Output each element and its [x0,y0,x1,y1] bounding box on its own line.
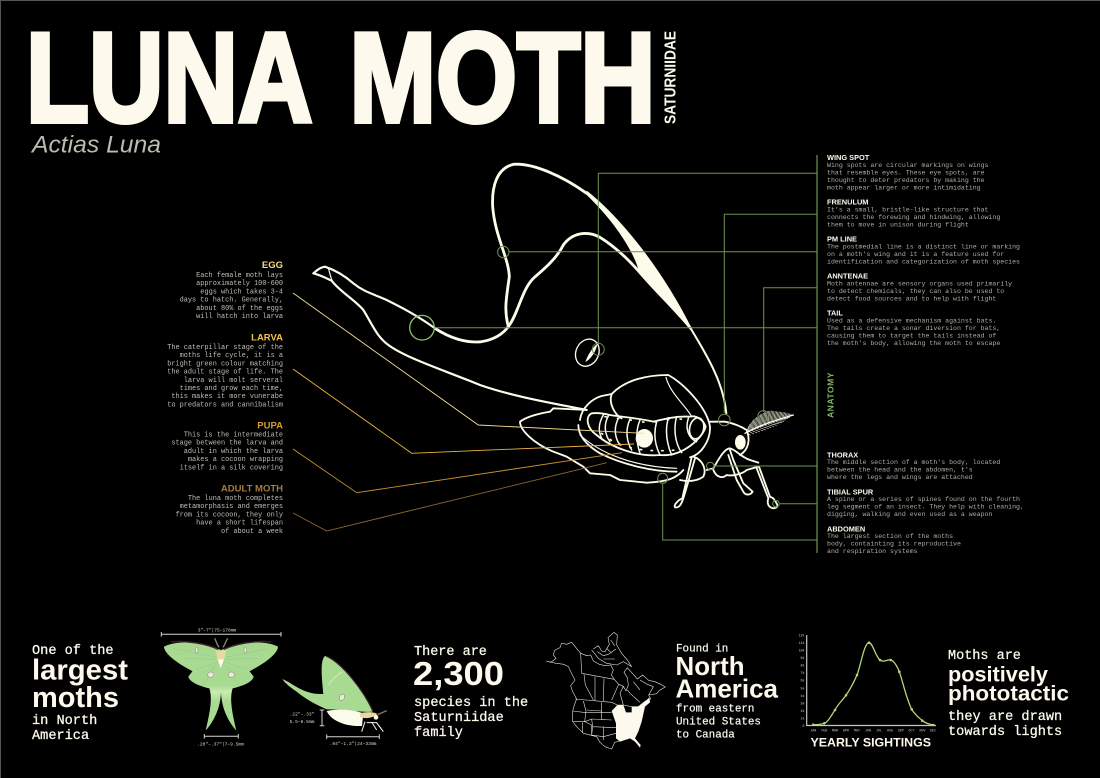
forewing outline [313,164,726,413]
x axis labels: DEC [930,728,936,732]
family label: SATURNIIDAE [662,31,680,124]
line chart: yearly sightings [799,634,936,750]
life cycle: larva: to predators and cannibalism [167,401,283,409]
anatomy: pm line: identification and categorization of moth species [827,258,1020,265]
sightings curve [813,643,933,725]
life cycle: egg: days to hatch. Generally, [180,297,283,305]
anatomy: tail: The tails create a sonar diversion for bats, [827,325,1000,332]
anatomy callout lines [410,155,817,553]
fact: north america: from eastern [676,704,754,716]
anatomy: antennae: Moth antennae are sensory organs used primarily [827,280,1012,287]
anatomy: tail: the moth's body, allowing the moth to escape [827,340,1000,347]
anatomy: wing spot: thought to deter predators by making the [827,177,985,184]
fact: phototactic: towards lights [948,725,1062,740]
chart title: YEARLY SIGHTINGS [810,736,931,750]
fact: phototactic: positively [948,663,1048,687]
life cycle: pupa: stage between the larva and [171,440,283,448]
fact: phototactic: phototactic [948,682,1069,706]
fact: species count: family [414,726,463,741]
life cycle: egg: approximately 100-600 [196,280,283,288]
y axis labels: 2k [801,709,805,713]
y axis labels: 6k [801,679,805,683]
anatomy: tibial spur: digging, walking and even used as a weapon [827,511,992,518]
anatomy: abdomen: body, containting its reproductive [827,540,961,548]
y axis labels: 9k [801,656,805,660]
anatomy: thorax: where the legs and wings are attached [827,474,973,481]
life cycle: adult moth: ADULT MOTH [221,484,283,495]
anatomy: tail: TAIL [827,309,843,318]
life cycle: adult moth: have a short lifespan [196,520,283,528]
life cycle: egg: eggs which takes 3-4 [200,288,283,296]
anatomy: wing spot [827,153,989,192]
chart axes [807,635,936,726]
anatomy: pm line: PM LINE [827,234,857,244]
y axis labels [799,634,805,728]
anatomy: thorax: The middle section of a moth's body, located [827,459,1000,466]
map of North America [546,632,665,749]
life cycle: adult moth: from its cocoon, they only [175,511,283,519]
anatomy: tail: causing them to target the tails instead of [827,332,996,339]
x axis labels: AUG [887,728,893,732]
title [26,6,656,148]
life cycle: larva: this makes it more vunerabe [171,393,283,401]
life cycle: larva: the adult stage of life. The [167,369,283,377]
fact: species count: species in the [414,696,528,711]
x axis labels: NOV [920,728,925,732]
life cycle: larva: The caterpillar stage of the [167,344,283,352]
fact: largest moths: largest [32,654,128,686]
fact: largest moths: America [32,729,89,744]
anatomy: abdomen [827,524,961,555]
life cycle: larva: times and grow each time, [180,385,283,393]
anatomy: thorax [827,450,1000,481]
fact: largest moths [32,644,128,744]
x axis labels: OCT [909,728,914,732]
dimension labels [161,628,379,747]
x axis labels: MAY [854,728,860,732]
fact: species count: There are [414,645,487,660]
anatomy: antennae: ANNTENAE [827,272,868,281]
life cycle: pupa: This is the intermediate [184,432,283,440]
y axis labels: 4k [801,694,805,698]
fact: north america [676,644,779,742]
anatomy: tibial spur: leg segment of an insect. They help with cleaning, [827,504,1024,510]
life cycle: larva: LARVA [251,332,283,344]
life cycle: pupa: itself in a silk covering [180,464,283,472]
y axis labels: 12k [799,634,805,638]
x axis labels: SEP [898,728,904,732]
illustration: moth side view [282,656,387,732]
anatomy: pm line: The postmedial line is a distinct line or marking [827,243,1020,250]
life cycle: egg: will hatch into larva [196,313,283,321]
life cycle: adult moth: of about a week [221,528,283,536]
anatomy: frenulum [827,197,1000,228]
anatomy: tibial spur: A spine or a series of spines found on the fourth [827,496,1020,503]
life cycle: larva: moths life cycle, it is a [180,352,283,360]
anatomy: frenulum: It's a small, bristle-like structure that [827,206,989,213]
anatomy: antennae: to detect chemicals, they can also be used to [827,288,1004,295]
life cycle: egg [180,260,283,321]
y axis labels: 0 [803,724,805,728]
x axis labels: JUL [876,728,882,732]
life cycle: larva: bright green colour matching [167,360,283,368]
circle markers [410,246,779,507]
anatomy: antennae: detect food sources and to help with flight [827,295,996,302]
fact: north america: Found in [676,644,728,656]
dimension labels: .20"–.37"|7–9.5mm [197,741,244,747]
x axis labels: APR [843,728,849,732]
y axis labels: 5k [801,686,805,690]
x axis labels: JAN [810,728,816,732]
fact: species count: 2,300 [413,655,504,692]
x axis labels: FEB [821,728,827,732]
y axis labels: 8k [801,664,805,668]
anatomy: tibial spur [827,487,1024,518]
title: MOTH [350,6,656,148]
anatomy: wing spot: that resemble eyes. These eye spots, are [827,170,985,176]
anatomy: wing spot: WING SPOT [827,153,870,162]
fact: largest moths: One of the [32,644,114,659]
anatomy: wing spot: moth appear larger or more intimidating [827,184,981,192]
life cycle: pupa: PUPA [257,420,283,432]
life cycle: pupa [171,420,283,472]
fact: largest moths: moths [32,682,119,714]
life cycle: egg: EGG [262,260,283,271]
antenna feather [747,411,791,435]
scientific name: Actias Luna [30,132,161,158]
life cycle callout lines [293,293,644,531]
dimension labels: 5.5–8.5mm [290,719,315,725]
fact: species count [413,645,528,741]
anatomy: thorax: between the head and the abdomen, t's [827,466,973,474]
anatomy: tibial spur: TIBIAL SPUR [827,487,874,496]
life cycle: pupa: makes a cocoon wrapping [188,456,283,464]
y axis labels: 10k [799,648,805,652]
y axis labels: 1k [801,717,805,721]
anatomy vertical label: ANATOMY [825,372,835,418]
fact: phototactic [948,649,1069,740]
life cycle: egg: about 80% of the eggs [196,305,283,313]
body, larva and legs [520,375,793,508]
life cycle: larva [167,332,283,409]
life cycle: adult moth: metamorphasis and emerges [180,503,283,511]
fact: species count: Saturniidae [414,711,504,726]
anatomy: frenulum: connects the forewing and hindwing, allowing [827,214,1000,221]
dimension labels: .94"–1.3"|24–33mm [330,741,377,747]
illustration: moth top view [164,638,278,731]
anatomy: wing spot: Wing spots are circular markings on wings [827,162,989,169]
anatomy: tail: Used as a defensive mechanism against bats. [827,317,996,324]
fact: largest moths: in North [32,714,97,729]
moth anatomy diagram [313,164,793,508]
life cycle: adult moth [175,484,283,536]
title: LUNA [26,6,312,148]
fact: north america: to Canada [676,730,735,742]
fact: north america: North [676,653,744,681]
life cycle: egg: Each female moth lays [196,272,283,280]
anatomy: abdomen: ABDOMEN [827,524,865,533]
fact: north america: America [676,675,779,703]
anatomy: pm line: on a moth's wing and it is a feature used for [827,251,1004,258]
anatomy: frenulum: them to move in unison during flight [827,221,969,228]
anatomy: thorax: THORAX [827,450,858,459]
fact: phototactic: Moths are [948,649,1021,664]
anatomy: pm line [827,234,1020,265]
y axis labels: 11k [799,641,805,645]
fact: north america: United States [676,716,761,728]
anatomy: frenulum: FRENULUM [827,197,868,206]
anatomy: abdomen: The largest section of the moths [827,533,953,540]
life cycle: adult moth: The luna moth completes [188,495,283,503]
x axis labels: MAR [832,728,838,732]
anatomy: tail [827,309,1000,347]
fact: phototactic: they are drawn [948,710,1062,725]
y axis labels: 7k [801,671,805,675]
x axis labels [810,728,936,732]
anatomy: abdomen: and respiration systems [827,548,918,555]
dimension labels: .22"–.33" [290,712,315,718]
life cycle: pupa: adult in which the larva [184,448,283,456]
life cycle: larva: larva will molt serveral [184,377,283,385]
dimension labels: 3"–7"|75–178mm [198,628,237,634]
anatomy: antennae [827,272,1012,302]
x axis labels: JUN [865,728,871,732]
y axis labels: 3k [801,702,805,706]
